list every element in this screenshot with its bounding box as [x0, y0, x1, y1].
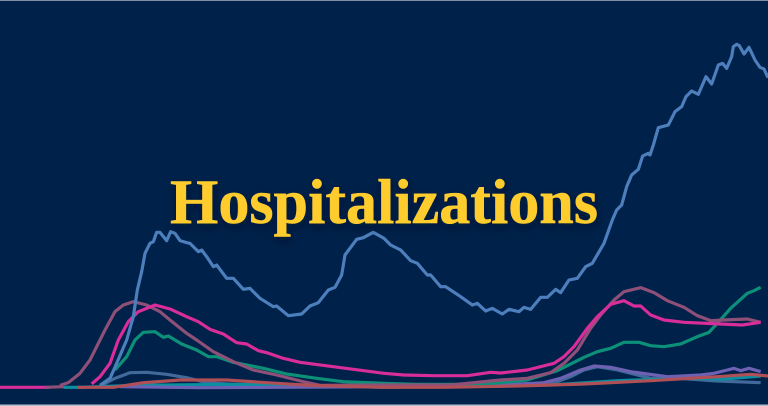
line: mauve baseline — [46, 382, 63, 392]
line: red-brown series — [77, 374, 768, 387]
line: slate blue series — [100, 367, 761, 386]
line: green series — [115, 287, 761, 384]
title: Hospitalizations — [170, 166, 598, 237]
line: purple series — [120, 366, 761, 388]
line: magenta series — [92, 301, 761, 384]
line: main blue series — [100, 44, 768, 385]
line: mauve series — [60, 288, 761, 385]
line: teal series — [63, 376, 761, 387]
line: magenta baseline — [0, 383, 50, 392]
